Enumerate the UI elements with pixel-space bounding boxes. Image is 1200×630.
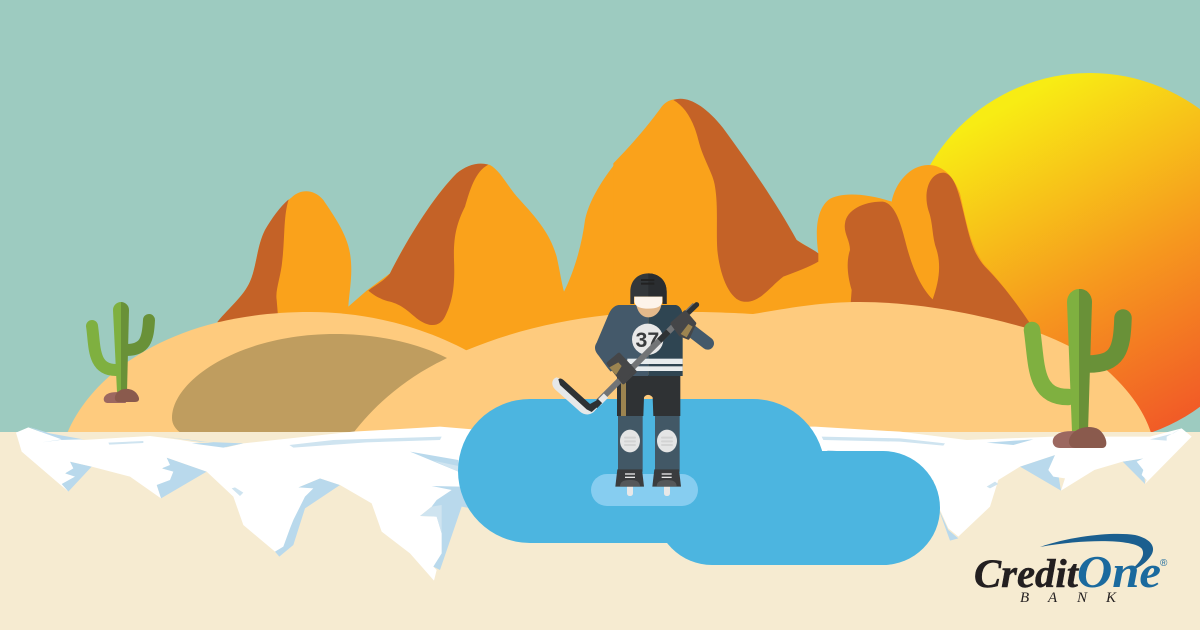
logo: Credit One Bank [974,534,1168,606]
hockey stick blade [552,377,601,414]
rocks [104,392,126,403]
right arm [682,323,708,343]
ice sheet: right [800,427,1192,541]
skate blades [627,484,633,496]
logo subline: B [1020,590,1029,606]
hockey player [552,273,708,496]
lower glove [608,354,635,383]
jersey stripes [627,359,683,364]
logo subline: K [1105,590,1117,606]
rocks [1053,431,1090,448]
ice sheet: left [16,427,480,581]
stick shaft [598,305,695,402]
upper glove [672,312,695,338]
jersey number badge [632,324,663,355]
logo subline: N [1076,590,1088,606]
sun [905,73,1200,443]
sand hill: right [348,302,1152,445]
skates [615,469,644,487]
shorts [617,375,680,416]
registered mark: ® [1160,558,1168,569]
jersey [595,305,648,376]
logo: Credit One Bank: One [1077,547,1161,597]
jersey number: 37 [635,328,659,352]
mountains: left pair [217,153,627,390]
cactus: right [1032,289,1123,448]
mountains: central and right ranges [613,99,1030,357]
logo wordmark: Credit [974,551,1080,596]
frozen pond [458,399,940,565]
light ice patch under skates [591,474,698,506]
knee pads [620,430,677,452]
sand hill: left [66,312,530,436]
sandy ground [0,432,1200,630]
neck [636,303,662,317]
sand hill shadow [172,334,447,442]
cactus: left [92,302,149,403]
logo subline: A [1047,590,1058,606]
sky background [0,0,1200,435]
legs [618,413,643,472]
face visor [634,297,662,309]
logo swoosh [1040,534,1153,571]
helmet [630,273,667,304]
